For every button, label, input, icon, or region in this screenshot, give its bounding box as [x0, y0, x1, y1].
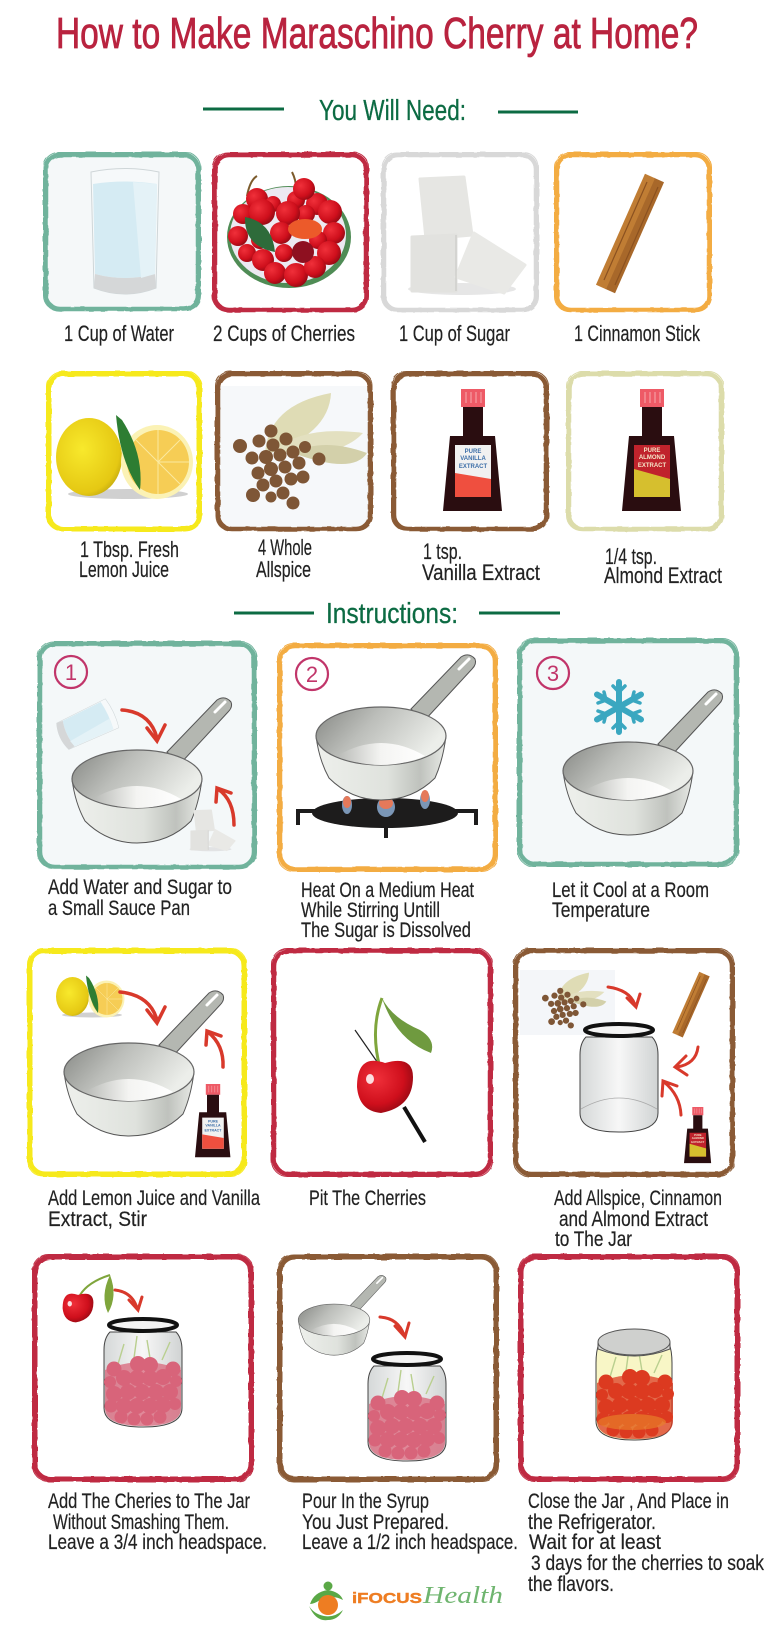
frame: [566, 372, 724, 530]
caption: Let it Cool at a Room: [552, 879, 709, 902]
panel: water: [44, 152, 200, 346]
arrow: allspice to jar: [608, 987, 640, 1007]
icon: stove: [298, 798, 476, 838]
caption: [48, 1490, 267, 1554]
icon: almond bottle: [684, 1107, 711, 1163]
panel: step 1: [38, 642, 256, 920]
frame: [392, 372, 548, 530]
label: 1/4 tsp.: [605, 544, 657, 569]
icon: saucepan: [72, 698, 232, 843]
frame: [216, 372, 372, 530]
icon: cinnamon stick: [601, 176, 659, 291]
caption: You Just Prepared.: [302, 1511, 449, 1534]
logo: iFocus Health: [309, 1582, 503, 1620]
caption: the flavors.: [528, 1573, 614, 1596]
frame: [46, 372, 202, 530]
panel: step 3: [518, 638, 738, 922]
icon: jar of cherries: [104, 1319, 182, 1427]
badge 3: [537, 657, 569, 689]
icon: cherry: [63, 1275, 114, 1322]
logo wordmark: iFOCUS: [352, 1590, 422, 1607]
caption: Leave a 3/4 inch headspace.: [48, 1531, 267, 1554]
icon: almond bottle: [622, 389, 681, 511]
caption: While Stirring Untill: [301, 899, 440, 922]
caption: [552, 879, 709, 922]
arrow: water to pan: [122, 710, 165, 741]
caption: [48, 876, 232, 920]
label line 2: Lemon Juice: [79, 557, 169, 582]
panel: step 7: [32, 1254, 267, 1554]
panel: lemon: [46, 372, 202, 582]
frame: [212, 152, 368, 312]
icon: saucepan: [563, 690, 723, 835]
panel: step 9: [518, 1254, 764, 1596]
frame: [28, 948, 246, 1176]
caption: Heat On a Medium Heat: [301, 879, 474, 902]
arrow: lemon to pan: [120, 992, 165, 1023]
arrow: pan to jar: [380, 1317, 409, 1337]
caption: a Small Sauce Pan: [48, 897, 190, 920]
label: 4 Whole: [258, 535, 312, 560]
icon: saucepan: [316, 655, 476, 800]
frame: [382, 152, 538, 312]
caption: Without Smashing Them.: [53, 1511, 229, 1534]
icon: jar of cherries: [368, 1353, 446, 1461]
arrow: vanilla to pan: [206, 1031, 223, 1067]
panel: step 6: [514, 948, 734, 1251]
icon: glass of water: [91, 168, 159, 294]
label: 1 Tbsp. Fresh: [80, 537, 179, 562]
panel: cinnamon: [554, 152, 712, 346]
badge 3: 3: [547, 661, 559, 686]
caption: [528, 1490, 764, 1596]
frame: [554, 152, 712, 312]
panel: step 5: [272, 948, 492, 1210]
arrow: cinnamon to jar: [675, 1047, 698, 1075]
frame: [272, 948, 492, 1176]
panel: vanilla: [392, 372, 548, 585]
arrow: extract to jar: [662, 1081, 681, 1115]
caption: to The Jar: [555, 1228, 632, 1251]
caption: Add Lemon Juice and Vanilla: [48, 1187, 260, 1210]
panel: step 2: [278, 644, 498, 942]
icon: lemon: [56, 415, 193, 499]
icon: saucepan: [298, 1275, 386, 1355]
panel: allspice: [216, 372, 372, 582]
heading: instructions: Instructions:: [326, 598, 458, 630]
frame: [518, 1254, 740, 1482]
icon: closed jar: [596, 1329, 674, 1440]
icon: allspice: [233, 393, 367, 510]
caption: [301, 879, 474, 942]
caption: [554, 1187, 722, 1251]
frame: [278, 1254, 498, 1482]
frame: [44, 152, 200, 310]
badge 2: [296, 658, 328, 690]
heading: you will need: You Will Need:: [319, 95, 466, 127]
frame: [32, 1254, 254, 1482]
frame: [518, 638, 738, 866]
caption: Leave a 1/2 inch headspace.: [302, 1531, 518, 1554]
icon: tilted glass: [53, 698, 120, 752]
icon: flames: [342, 790, 430, 817]
badge 1: 1: [65, 660, 77, 685]
caption: and Almond Extract: [559, 1208, 708, 1231]
panel: almond: [566, 372, 724, 588]
caption: Extract, Stir: [48, 1208, 147, 1231]
icon: cinnamon: [675, 973, 707, 1036]
panel: cherries: [212, 152, 368, 346]
heading: you will need: [203, 95, 578, 127]
label line 2: Almond Extract: [604, 563, 722, 588]
caption: the Refrigerator.: [528, 1511, 656, 1534]
badge 1: [55, 656, 87, 688]
frame: [278, 644, 498, 872]
caption: Pour In the Syrup: [302, 1490, 429, 1513]
label: 1 Cup of Water: [64, 321, 174, 346]
icon: vanilla bottle: [195, 1084, 230, 1157]
icon: saucepan: [64, 991, 224, 1136]
arrow: cherry to jar: [115, 1290, 142, 1310]
badge 2: 2: [306, 662, 318, 687]
caption: Add Water and Sugar to: [48, 876, 232, 899]
label line 2: Allspice: [256, 557, 311, 582]
frame: [514, 948, 734, 1176]
caption: [302, 1490, 518, 1554]
icon: sugar cubes: [408, 177, 525, 295]
caption: The Sugar is Dissolved: [301, 919, 471, 942]
heading: instructions: [234, 598, 560, 630]
panel: step 4: [28, 948, 260, 1231]
caption: Add The Cheries to The Jar: [48, 1490, 250, 1513]
icon: vanilla bottle: [443, 389, 502, 511]
icon: cherry with pit needle: [355, 998, 432, 1142]
icon: bowl of cherries: [227, 172, 351, 288]
label: 1 Cinnamon Stick: [574, 321, 701, 346]
panel: sugar: [382, 152, 538, 346]
caption: Pit The Cherries: [309, 1187, 426, 1210]
icon: allspice: [542, 973, 606, 1029]
panel: step 8: [278, 1254, 518, 1554]
caption: Wait for at least: [529, 1531, 661, 1554]
icon: lemon: [56, 976, 124, 1018]
icon: sugar: [189, 810, 235, 851]
icon: snowflake: [597, 682, 641, 732]
arrow: sugar to pan: [216, 788, 234, 825]
frame: [38, 642, 256, 868]
label: 1 Cup of Sugar: [399, 321, 510, 346]
label: 1 tsp.: [423, 539, 462, 564]
label line 2: Vanilla Extract: [422, 560, 540, 585]
icon: jar: [580, 1024, 658, 1132]
label: 2 Cups of Cherries: [213, 321, 355, 346]
caption: [48, 1187, 260, 1231]
logo script: Health: [422, 1583, 503, 1609]
caption: Temperature: [552, 899, 650, 922]
logo icon: [309, 1582, 343, 1620]
